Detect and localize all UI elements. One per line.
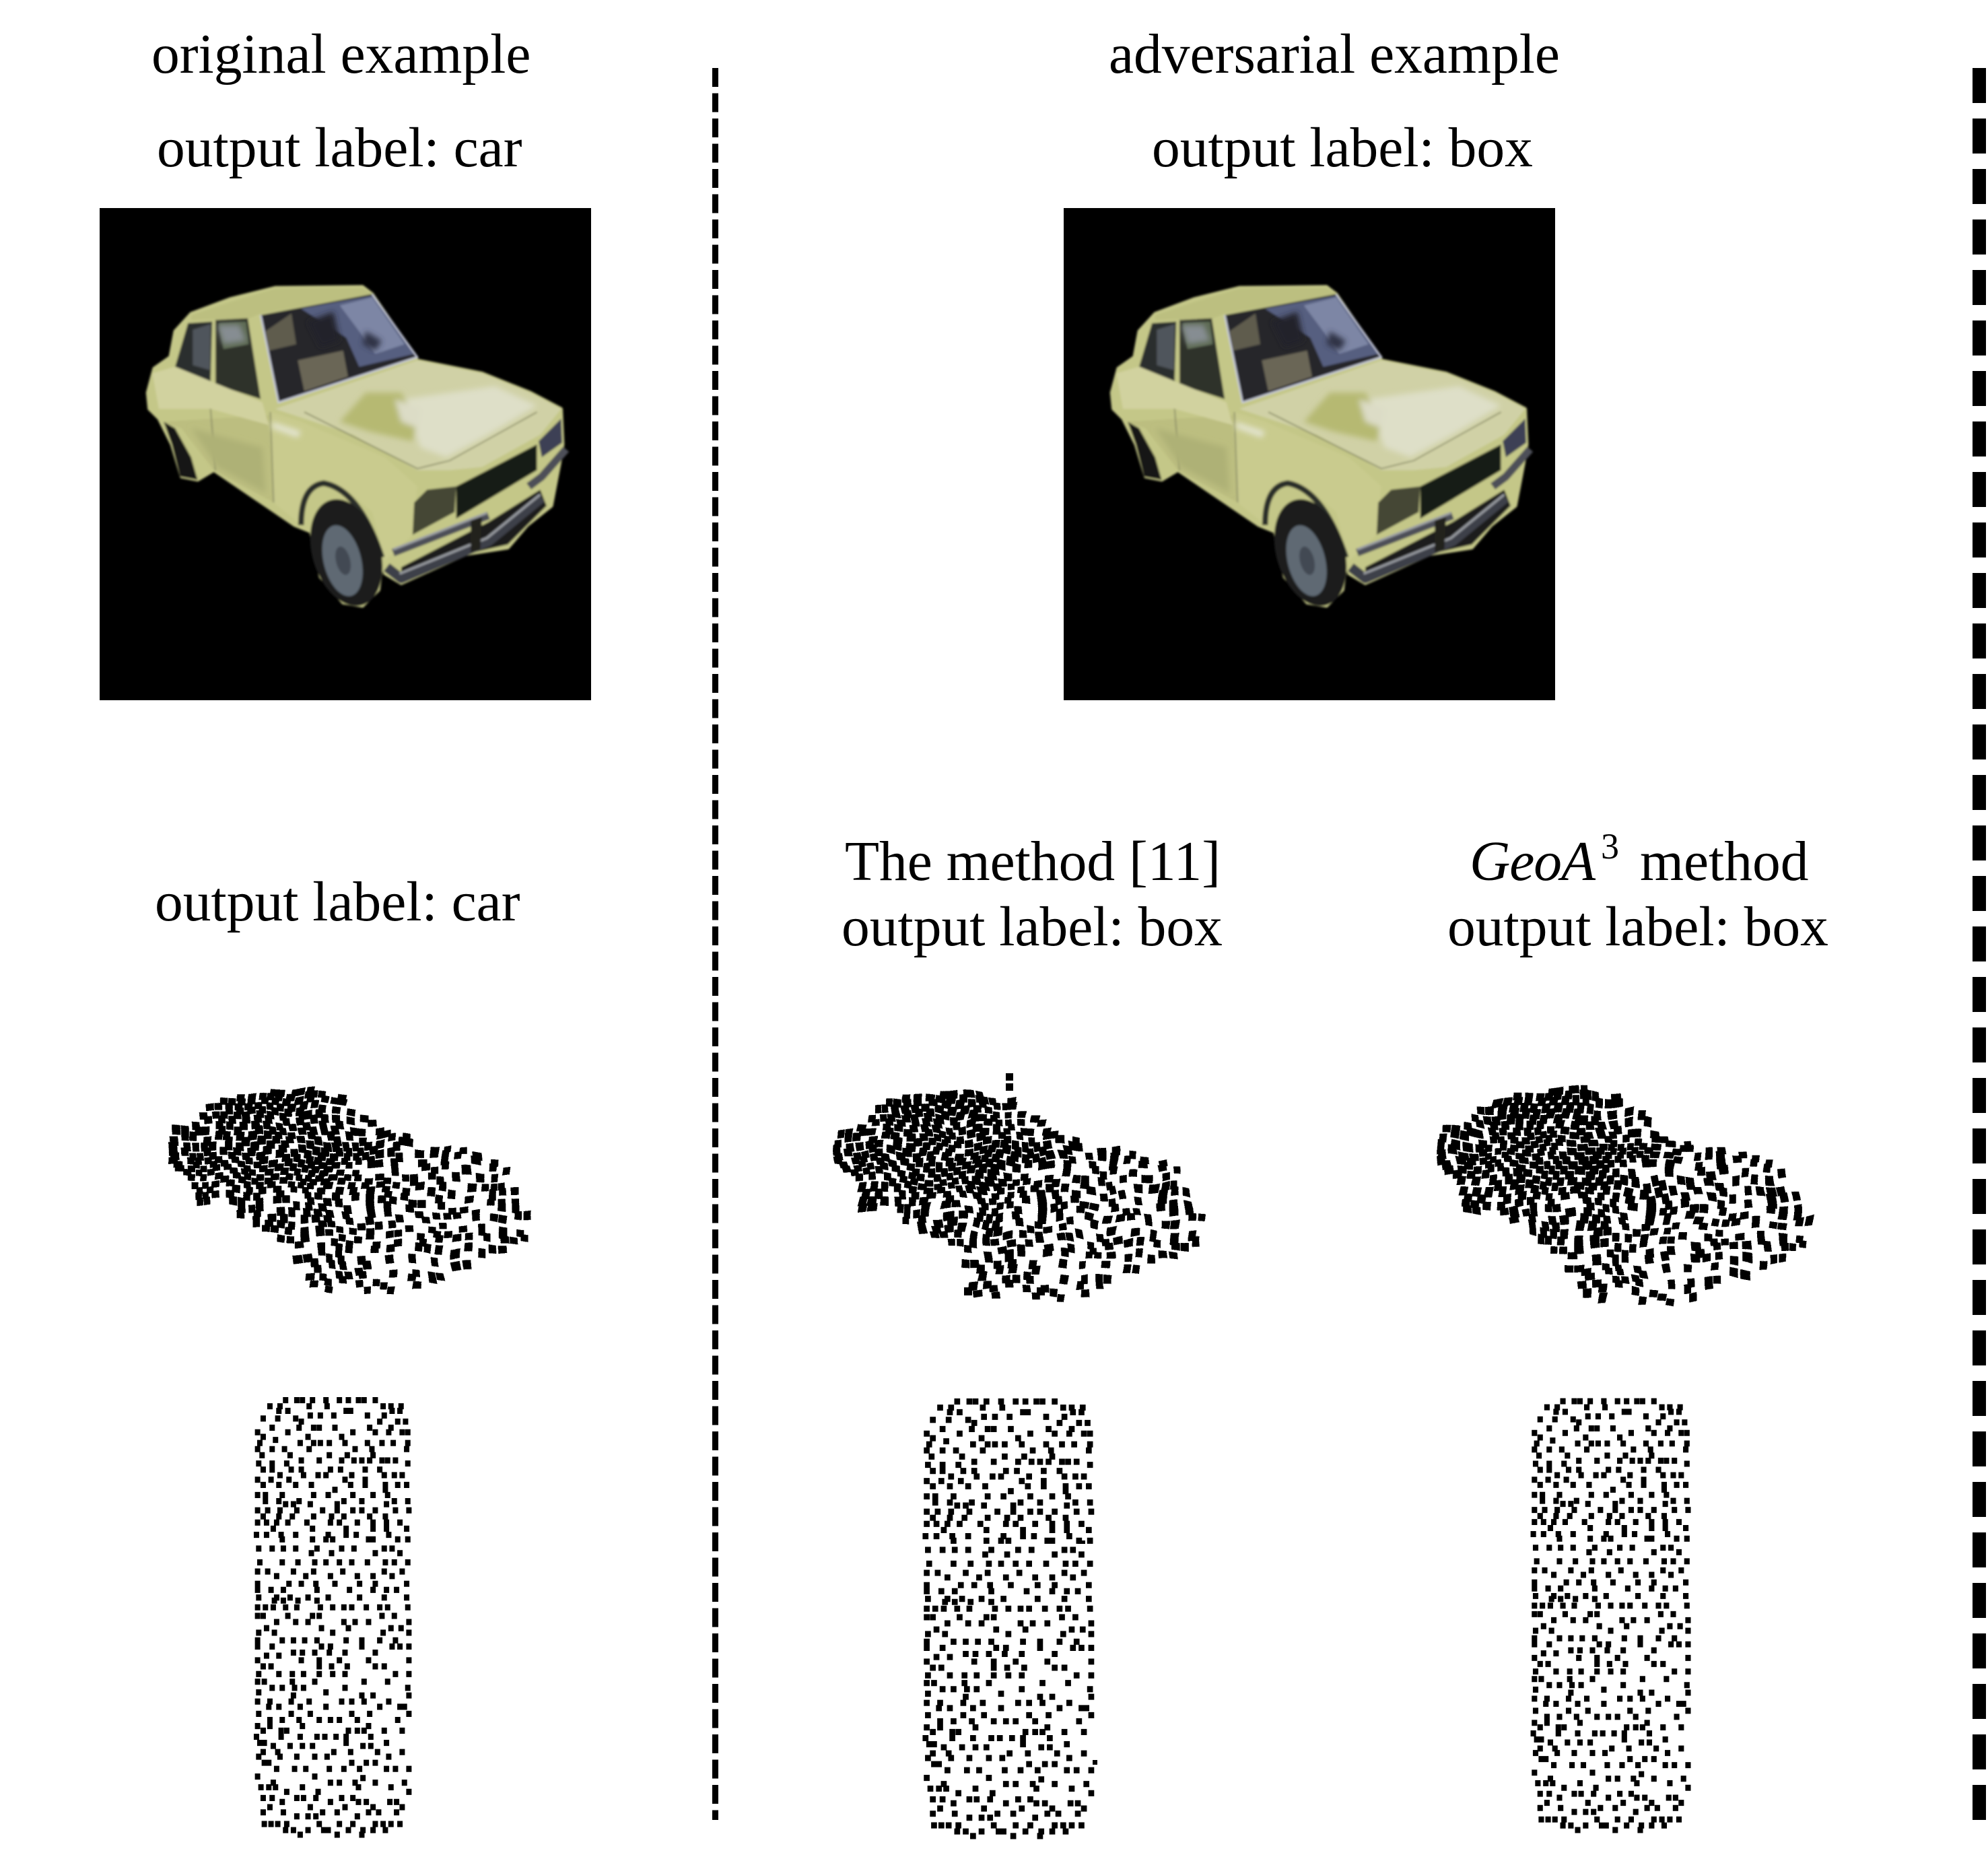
label: GeoA3 method: 3 [1601,826,1619,867]
point cloud: original box [254,1400,411,1835]
point cloud: original car [168,1093,532,1290]
image: original car photo [100,208,591,700]
label: GeoA3 method: method [1640,831,1808,893]
point cloud: box by GeoA3 [1531,1401,1691,1830]
divider: right dashed line [1973,68,1986,1820]
label: the method [11] [842,831,1223,958]
divider: middle dashed line [712,68,718,1820]
image: adversarial car photo [1064,208,1555,700]
label: output label box (top): output label: box [1152,117,1533,179]
label: the method [11]: output label: box [842,896,1223,958]
label: GeoA3 method [1447,826,1828,958]
point cloud: car by GeoA3 [1439,1093,1812,1300]
title: adversarial example: adversarial example [1109,24,1560,86]
label: GeoA3 method: GeoA [1470,831,1596,893]
point cloud: box by method [11] [922,1402,1097,1836]
label: output label car (point cloud): output label: car [155,871,520,933]
label: the method [11]: The method [11] [845,831,1221,893]
point cloud: car by method [11] [835,1073,1203,1295]
label: GeoA3 method: output label: box [1447,896,1828,958]
title: original example: original example [151,24,530,86]
label: output label car (top): output label: car [157,117,522,179]
